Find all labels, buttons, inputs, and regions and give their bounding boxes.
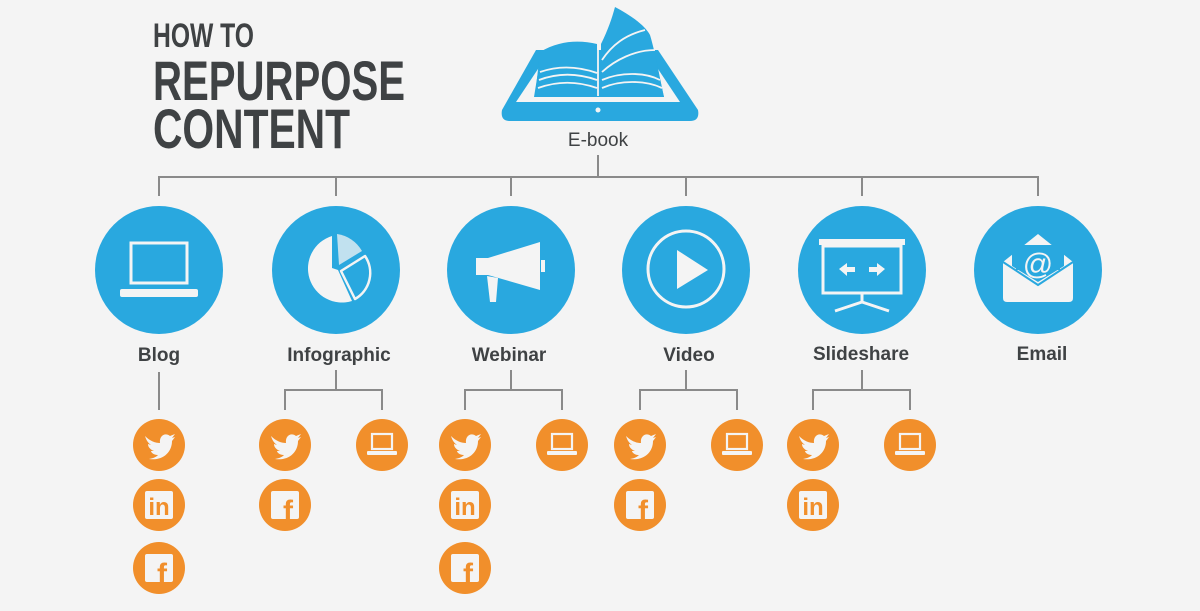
panel: Infographic: [259, 206, 408, 531]
panel: Video: Video: [663, 345, 715, 366]
panel: Email: @: [1023, 248, 1053, 281]
panel: Slideshare: Slideshare: [813, 344, 909, 365]
panel: Webinar: Webinar: [472, 345, 547, 366]
panel: Infographic: Infographic: [287, 345, 391, 366]
title: REPURPOSE: [153, 49, 405, 112]
panel: Email: [974, 206, 1102, 365]
icon: e-book: [502, 7, 698, 121]
panel: Webinar: [439, 206, 588, 594]
panel: Slideshare: [787, 206, 936, 531]
panel: Email: Email: [1017, 344, 1067, 365]
panel: Blog: [95, 206, 223, 594]
panel: Video: [614, 206, 763, 531]
title: [153, 17, 405, 160]
label: E-book: E-book: [568, 130, 629, 151]
title: HOW TO: [153, 17, 254, 55]
connector lines: [159, 155, 1038, 410]
title: CONTENT: [153, 97, 350, 160]
panel: Blog: Blog: [138, 345, 180, 366]
